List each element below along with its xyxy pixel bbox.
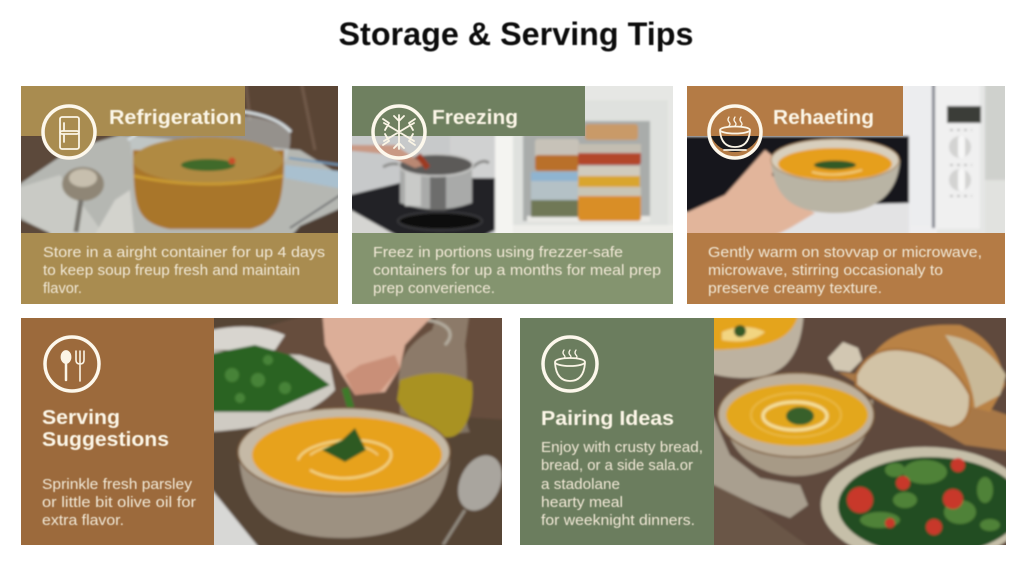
panel: pairing ideas [520,318,1006,545]
text block [43,245,325,297]
text block [708,245,982,297]
text block: for weeknight dinners. [541,513,695,529]
text block: flavor. [43,281,82,297]
title: Storage & Serving Tips [338,16,694,52]
header banner [21,86,245,136]
photo: soup with bread and salad [714,318,1006,545]
text block: extra flavor. [42,513,124,529]
panel: refrigeration [21,86,338,304]
photo: soup in glass container [21,86,338,233]
heading: Refrigeration [109,107,242,129]
text block: containers for up a months for meal prep [373,263,661,279]
text block: to keep soup freup fresh and maintain [43,263,300,279]
text block: Gently warm on stovvap or microwave, [708,245,982,261]
icon: bowl [543,337,597,391]
text block: Sprinkle fresh parsley [42,477,193,493]
panel: serving suggestions [21,308,512,555]
heading: Pairing Ideas [541,408,674,430]
heading: Serving [42,407,120,429]
heading: Suggestions [42,429,169,451]
text block: microwave, stirring occasionaly to [708,263,943,279]
text block: Enjoy with crusty bread, [541,440,703,456]
text block [373,245,661,297]
text block: Freez in portions using frezzer-safe [373,245,623,261]
panel: reheating [687,86,1005,304]
text block: preserve creamy texture. [708,281,882,297]
heading: Freezing [432,107,518,129]
header banner [687,86,903,136]
text block: or little bit olive oil for [42,495,196,511]
icon: snowflake [373,106,425,158]
text block [541,440,703,529]
text block: a stadolane [541,477,620,493]
icon: steaming bowl [709,106,761,158]
heading [42,407,169,451]
text block: prep converience. [373,281,495,297]
photo: sprinkling parsley on soup [214,318,502,545]
text block: Store in a airght container for up 4 days [43,245,325,261]
icon: spoon and fork [45,337,99,391]
heading: Rehaeting [773,107,874,129]
header banner [352,86,585,136]
photo: stove pot and freezer [352,86,673,233]
photo: bowl in microwave [687,86,1005,233]
icon: refrigerator [43,106,95,158]
text block: hearty meal [541,495,623,511]
panel: freezing [342,76,683,304]
text block: bread, or a side sala.or [541,458,693,474]
text block [42,477,196,529]
